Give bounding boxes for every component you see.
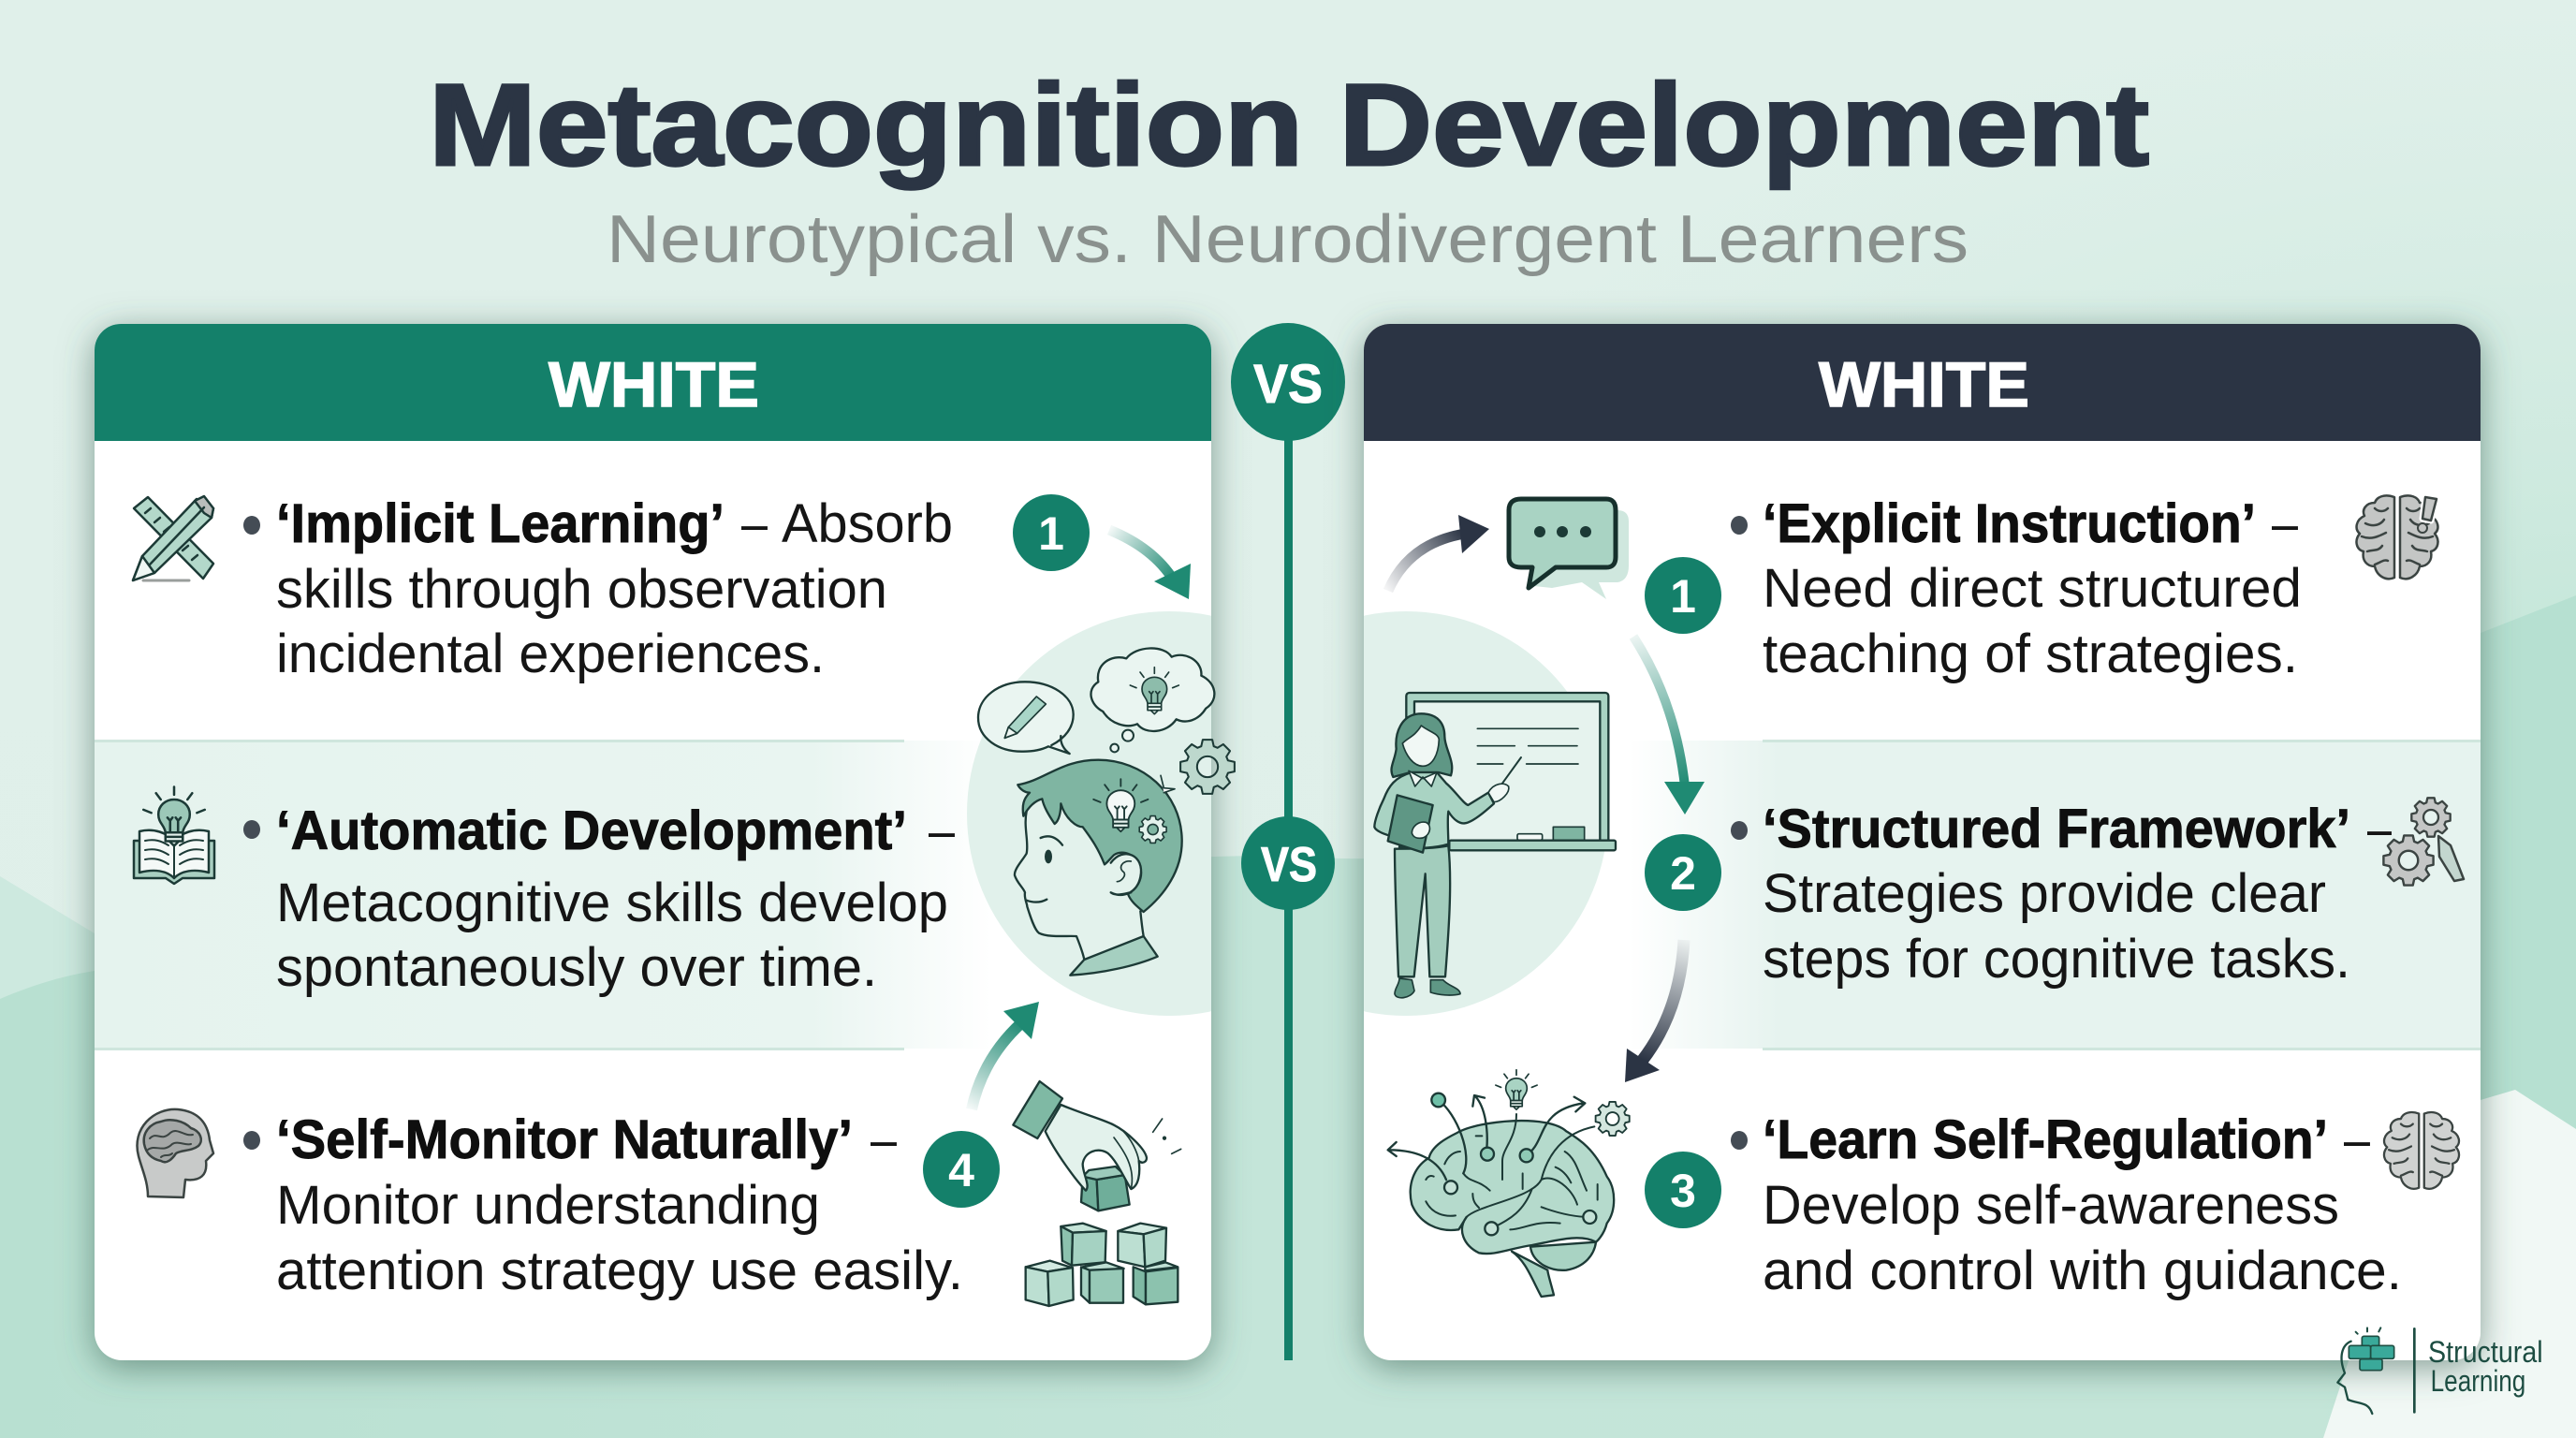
panel header xyxy=(95,324,1211,441)
arrow: teacher to speech xyxy=(1388,515,1489,591)
vs badge top: VS xyxy=(1253,354,1323,415)
text: learn self-regulation xyxy=(1763,1109,2402,1301)
text: learn self-regulation: Develop self-awareness xyxy=(1763,1175,2339,1236)
teacher xyxy=(1374,713,1521,998)
badge 3 xyxy=(1645,1152,1721,1228)
badge 1: 1 xyxy=(1670,570,1696,623)
text: automatic development: Metacognitive skills develop xyxy=(276,873,948,933)
badge 4: 4 xyxy=(948,1144,974,1196)
title: Metacognition Development xyxy=(429,61,2149,190)
speech bubble with pencil xyxy=(978,682,1074,754)
text: automatic development: ‘Automatic Development’ xyxy=(276,800,907,861)
icon: speech bubble xyxy=(1509,499,1629,599)
arrow: badge 1 to head xyxy=(1109,530,1191,599)
text: learn self-regulation: and control with guidance. xyxy=(1763,1240,2402,1301)
badge 2 xyxy=(1645,834,1721,911)
header label: WHITE xyxy=(549,349,759,420)
vs badge middle: VS xyxy=(1261,838,1317,892)
text: self-monitor naturally: attention strategy use easily. xyxy=(276,1240,963,1301)
text: explicit instruction: ‘Explicit Instruction’ xyxy=(1763,493,2256,554)
text: explicit instruction: teaching of strategies. xyxy=(1763,624,2298,684)
text: implicit learning: – xyxy=(741,493,768,554)
arrow: step 2 to 3 xyxy=(1625,940,1684,1082)
icon: head with brain xyxy=(137,1109,213,1197)
vs badge middle xyxy=(1241,816,1335,910)
icon: ruler and pencil xyxy=(133,496,213,580)
gear xyxy=(1596,1102,1630,1136)
text: self-monitor naturally: ‘Self-Monitor Naturally’ xyxy=(276,1109,853,1170)
text: learn self-regulation: ‘Learn Self-Regulation’ xyxy=(1763,1109,2328,1170)
bullet xyxy=(243,1131,260,1150)
text: explicit instruction xyxy=(1763,493,2302,684)
panel background xyxy=(95,324,1211,1360)
logo text: Learning xyxy=(2431,1364,2525,1398)
block stack xyxy=(1026,1224,1178,1306)
arrow: badge 4 to head xyxy=(972,1002,1039,1109)
panel: neurodivergent xyxy=(1204,324,2481,1360)
arrow: step 1 to 2 xyxy=(1633,637,1705,814)
gear xyxy=(1180,740,1235,794)
row band xyxy=(95,611,1211,1050)
whiteboard xyxy=(1406,693,1616,850)
text: structured framework: steps for cognitive tasks. xyxy=(1763,929,2350,990)
illustration: hand placing blocks xyxy=(1013,1081,1181,1306)
icon: gears and pencil xyxy=(2383,798,2464,886)
connection nodes xyxy=(1388,1093,1596,1235)
subtitle: Neurotypical vs. Neurodivergent Learners xyxy=(607,202,1969,277)
text: implicit learning: ‘Implicit Learning’ xyxy=(276,493,724,554)
logo mark xyxy=(2337,1328,2414,1414)
bulb xyxy=(1496,1070,1537,1109)
brain shape xyxy=(1411,1114,1614,1297)
text: implicit learning: skills through observation xyxy=(276,559,887,620)
vs badge top xyxy=(1231,323,1345,441)
text: automatic development: – xyxy=(929,800,956,861)
logo: structural learning xyxy=(2337,1328,2543,1414)
text: structured framework xyxy=(1763,799,2393,990)
icon: open book with bulb xyxy=(134,787,214,884)
text: self-monitor naturally: – xyxy=(871,1109,898,1170)
text: structured framework: ‘Structured Framework’ xyxy=(1763,799,2350,859)
text: implicit learning xyxy=(276,493,953,684)
text: structured framework: Strategies provide clear xyxy=(1763,863,2326,924)
divider line xyxy=(1284,383,1293,1360)
panel: neurotypical xyxy=(95,324,1371,1360)
text: self-monitor naturally xyxy=(276,1109,963,1301)
row band xyxy=(1364,611,2481,1050)
badge 1 xyxy=(1645,557,1721,634)
text: explicit instruction: Need direct structured xyxy=(1763,558,2302,619)
text: automatic development: spontaneously over time. xyxy=(276,937,877,998)
thought cloud xyxy=(1090,648,1214,752)
panel background xyxy=(1364,324,2481,1360)
text: structured framework: – xyxy=(2367,799,2393,859)
text: self-monitor naturally: Monitor understanding xyxy=(276,1175,820,1236)
panel header xyxy=(1364,324,2481,441)
held block xyxy=(1081,1167,1130,1211)
text: explicit instruction: – xyxy=(2272,493,2299,554)
badge 1: 1 xyxy=(1038,507,1064,560)
text: learn self-regulation: – xyxy=(2344,1109,2371,1170)
text: automatic development xyxy=(276,800,956,998)
bullet xyxy=(1731,821,1748,840)
text: implicit learning: Absorb xyxy=(782,493,953,554)
head xyxy=(1015,760,1182,976)
badge 1 xyxy=(1013,494,1090,571)
icon: brain with exclamation xyxy=(2357,495,2437,579)
badge 4 xyxy=(923,1131,1000,1208)
logo text: Structural xyxy=(2428,1335,2543,1369)
bullet xyxy=(1731,516,1748,535)
illustration: brain with connections xyxy=(1388,1070,1630,1297)
icon: brain xyxy=(2384,1112,2459,1189)
illustration: teacher at board xyxy=(1374,693,1616,998)
logo text xyxy=(2428,1335,2543,1398)
bullet xyxy=(1731,1131,1748,1150)
badge 3: 3 xyxy=(1670,1165,1696,1217)
hand xyxy=(1046,1105,1147,1191)
text: implicit learning: incidental experiences. xyxy=(276,624,825,684)
illustration: child head with ideas xyxy=(978,648,1235,976)
bullet xyxy=(243,516,260,535)
bullet xyxy=(243,820,260,839)
header label: WHITE xyxy=(1819,349,2029,420)
badge 2: 2 xyxy=(1670,847,1696,900)
